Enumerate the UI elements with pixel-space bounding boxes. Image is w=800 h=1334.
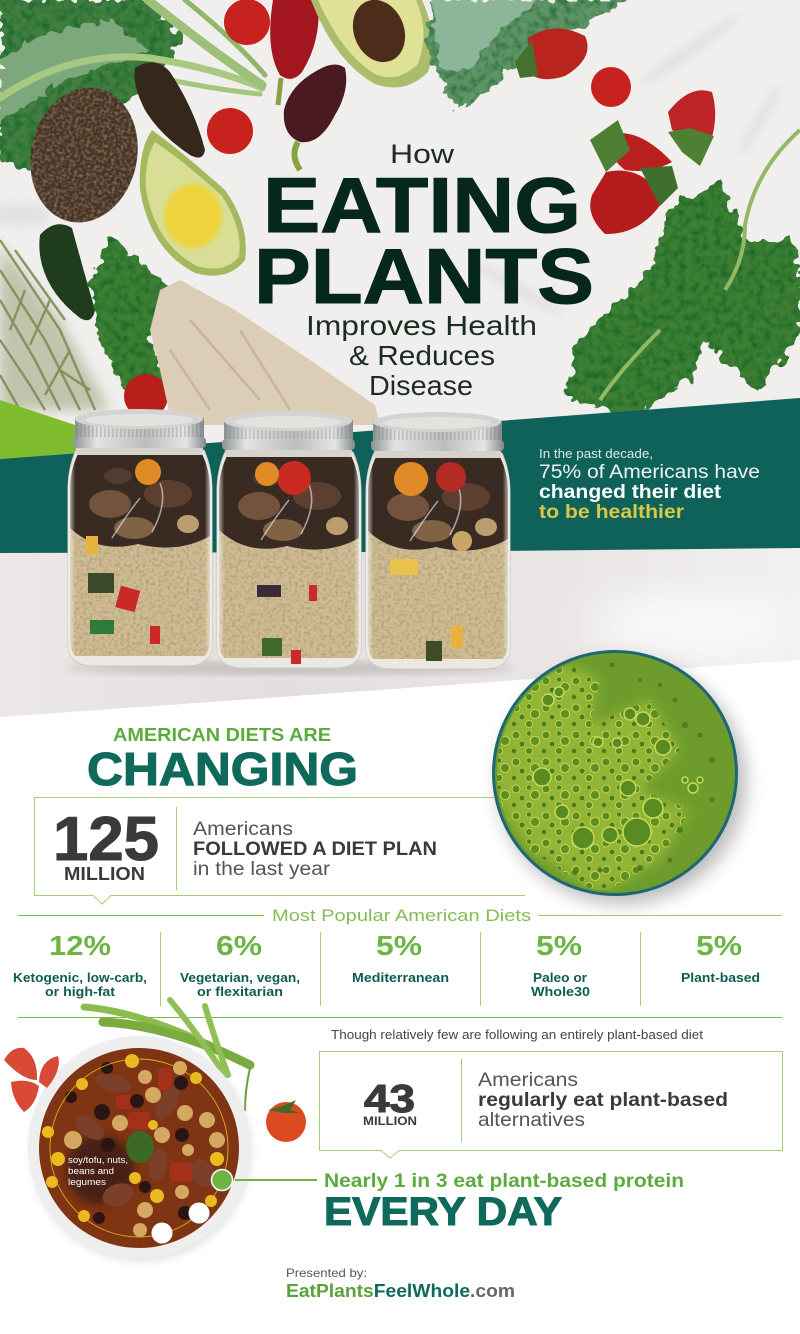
jar 1 [68,409,212,666]
bowl label [68,1155,128,1187]
jars [65,409,515,675]
foam pattern [495,660,690,895]
smoothie shadow [498,660,746,904]
pale kale leaf [432,0,540,70]
heading rule right [538,915,782,916]
heading rule left [18,915,264,916]
smoothie glass [492,650,746,904]
In the past decade: In the past decade, [539,446,653,461]
presenter credit [286,1266,515,1301]
herb garnish [126,1131,154,1163]
teal band [0,398,800,553]
title [254,139,594,401]
column: ketogenic [13,930,147,999]
every day callout [324,1170,684,1234]
dark jalapeno [134,62,205,158]
avocado half yellow [140,130,246,276]
nearly 1 in 3: Nearly 1 in 3 eat plant-based protein [324,1170,684,1192]
bowl label: beans and [68,1166,114,1176]
tomato bottom [124,374,168,418]
kale top right [428,0,630,110]
white marker [188,1202,210,1224]
presented by: Presented by: [286,1266,367,1280]
column: paleo [531,930,590,999]
thin yellow ring [50,1059,228,1237]
small dark specks [572,662,715,875]
EATING: EATING [263,161,581,249]
hero food photo [0,0,800,425]
Disease: Disease [369,370,473,401]
kale left [90,235,175,390]
thyme underlay [0,245,110,410]
green jalapeno [39,224,95,320]
smoothie surface [495,653,735,893]
scallions [84,1000,250,1110]
column: plant-based: Plant-based [681,970,760,985]
marble veins [0,11,784,320]
kale top left [0,0,185,172]
website: EatPlants FeelWhole .com [286,1281,515,1301]
kale stems right [600,130,800,400]
125: 125 [53,805,159,874]
thyme sprigs [0,240,95,410]
large bubbles [533,687,703,849]
changed their diet: changed their diet [539,482,722,503]
foam bubbles [495,660,715,895]
paper bag [150,280,380,425]
column: vegetarian: or flexitarian [197,984,283,999]
column: vegetarian: 6% [216,930,262,961]
dark red pepper [284,64,346,142]
jar 2 [217,411,361,668]
most popular diets [13,906,782,1018]
whole avocado [18,77,150,233]
column: plant-based [681,930,760,985]
box outline with pointer [34,798,525,904]
foam underlay [495,660,690,895]
column: paleo: 5% [536,930,582,961]
jar 3 [366,412,510,669]
bottom rule [18,1017,782,1018]
column: paleo: Paleo or [533,970,587,985]
floor behind jars [0,545,800,725]
eyebrow: AMERICAN DIETS ARE [113,725,331,745]
section heading: American diets are changing [87,725,358,795]
column: ketogenic: or high-fat [45,984,116,999]
How: How [390,139,455,169]
CHANGING: CHANGING [87,743,358,795]
followed a diet plan: FOLLOWED A DIET PLAN [193,839,437,860]
to be healthier: to be healthier [539,502,685,523]
column: plant-based: 5% [696,930,742,961]
strawberry middle [590,120,672,172]
tomato [591,67,631,107]
Americans: Americans [478,1070,578,1091]
corn [42,1054,224,1222]
kale right [565,180,800,420]
regularly eat plant-based: regularly eat plant-based [478,1090,728,1111]
divider [176,807,177,890]
column: paleo: Whole30 [531,984,590,999]
bowl label: soy/tofu, nuts, [68,1155,128,1165]
EVERY DAY: EVERY DAY [324,1190,562,1234]
divider [461,1059,462,1142]
heading: Most Popular American Diets [272,906,531,925]
stat box: 125 million [34,798,525,904]
pale kale leaf [0,20,150,125]
tomato slices [4,1048,59,1112]
strawberry lower [590,166,678,234]
Improves Health: Improves Health [306,310,537,341]
pepper stem [294,142,300,170]
column: mediterranean [352,930,449,985]
bowl label: legumes [68,1177,107,1187]
intro note: Though relatively few are following an entirely plant-based diet [331,1027,703,1042]
bowl shadow [30,1040,252,1262]
PLANTS: PLANTS [254,232,594,320]
dark area [66,1136,134,1204]
soup bowl illustration [28,1000,317,1262]
column: vegetarian [180,930,300,999]
strawberry right [668,90,715,166]
column: mediterranean: 5% [376,930,422,961]
green marker [212,1170,232,1190]
red pepper [270,0,319,79]
stat box: 43 million [320,1052,782,1158]
black beans [65,1062,192,1224]
pepper stem [278,78,281,105]
column: vegetarian: Vegetarian, vegan, [180,970,300,985]
43: 43 [364,1078,415,1121]
white lower sheet [0,660,800,1334]
jar shadow [65,661,515,675]
tomato [207,108,253,154]
kale stems [0,0,265,98]
column: ketogenic: 12% [49,930,111,961]
whole tomato [266,1100,306,1142]
white marker [152,1222,172,1244]
alternatives: alternatives [478,1110,585,1131]
beans [72,1070,220,1211]
column: ketogenic: Ketogenic, low-carb, [13,970,147,985]
bowl [28,1036,250,1258]
background: marble tabletop [0,0,800,470]
in the last year: in the last year [193,859,331,880]
75% of Americans have: 75% of Americans have [539,462,760,483]
avocado half with pit [311,0,433,88]
column: mediterranean: Mediterranean [352,970,449,985]
leader line [235,1179,317,1181]
chickpeas [64,1061,225,1237]
band text [539,446,760,523]
column dividers [160,932,641,1006]
glass rim [492,650,738,896]
MILLION: MILLION [64,864,145,884]
light green wedge [0,400,78,459]
box outline with pointer [320,1052,782,1158]
tomato chunks [116,1068,192,1182]
Americans: Americans [193,819,293,840]
floor glow [590,603,790,647]
soup [39,1048,239,1248]
MILLION: MILLION [363,1114,417,1128]
& Reduces: & Reduces [349,340,495,371]
strawberry top [515,28,588,79]
tomato [224,0,270,45]
